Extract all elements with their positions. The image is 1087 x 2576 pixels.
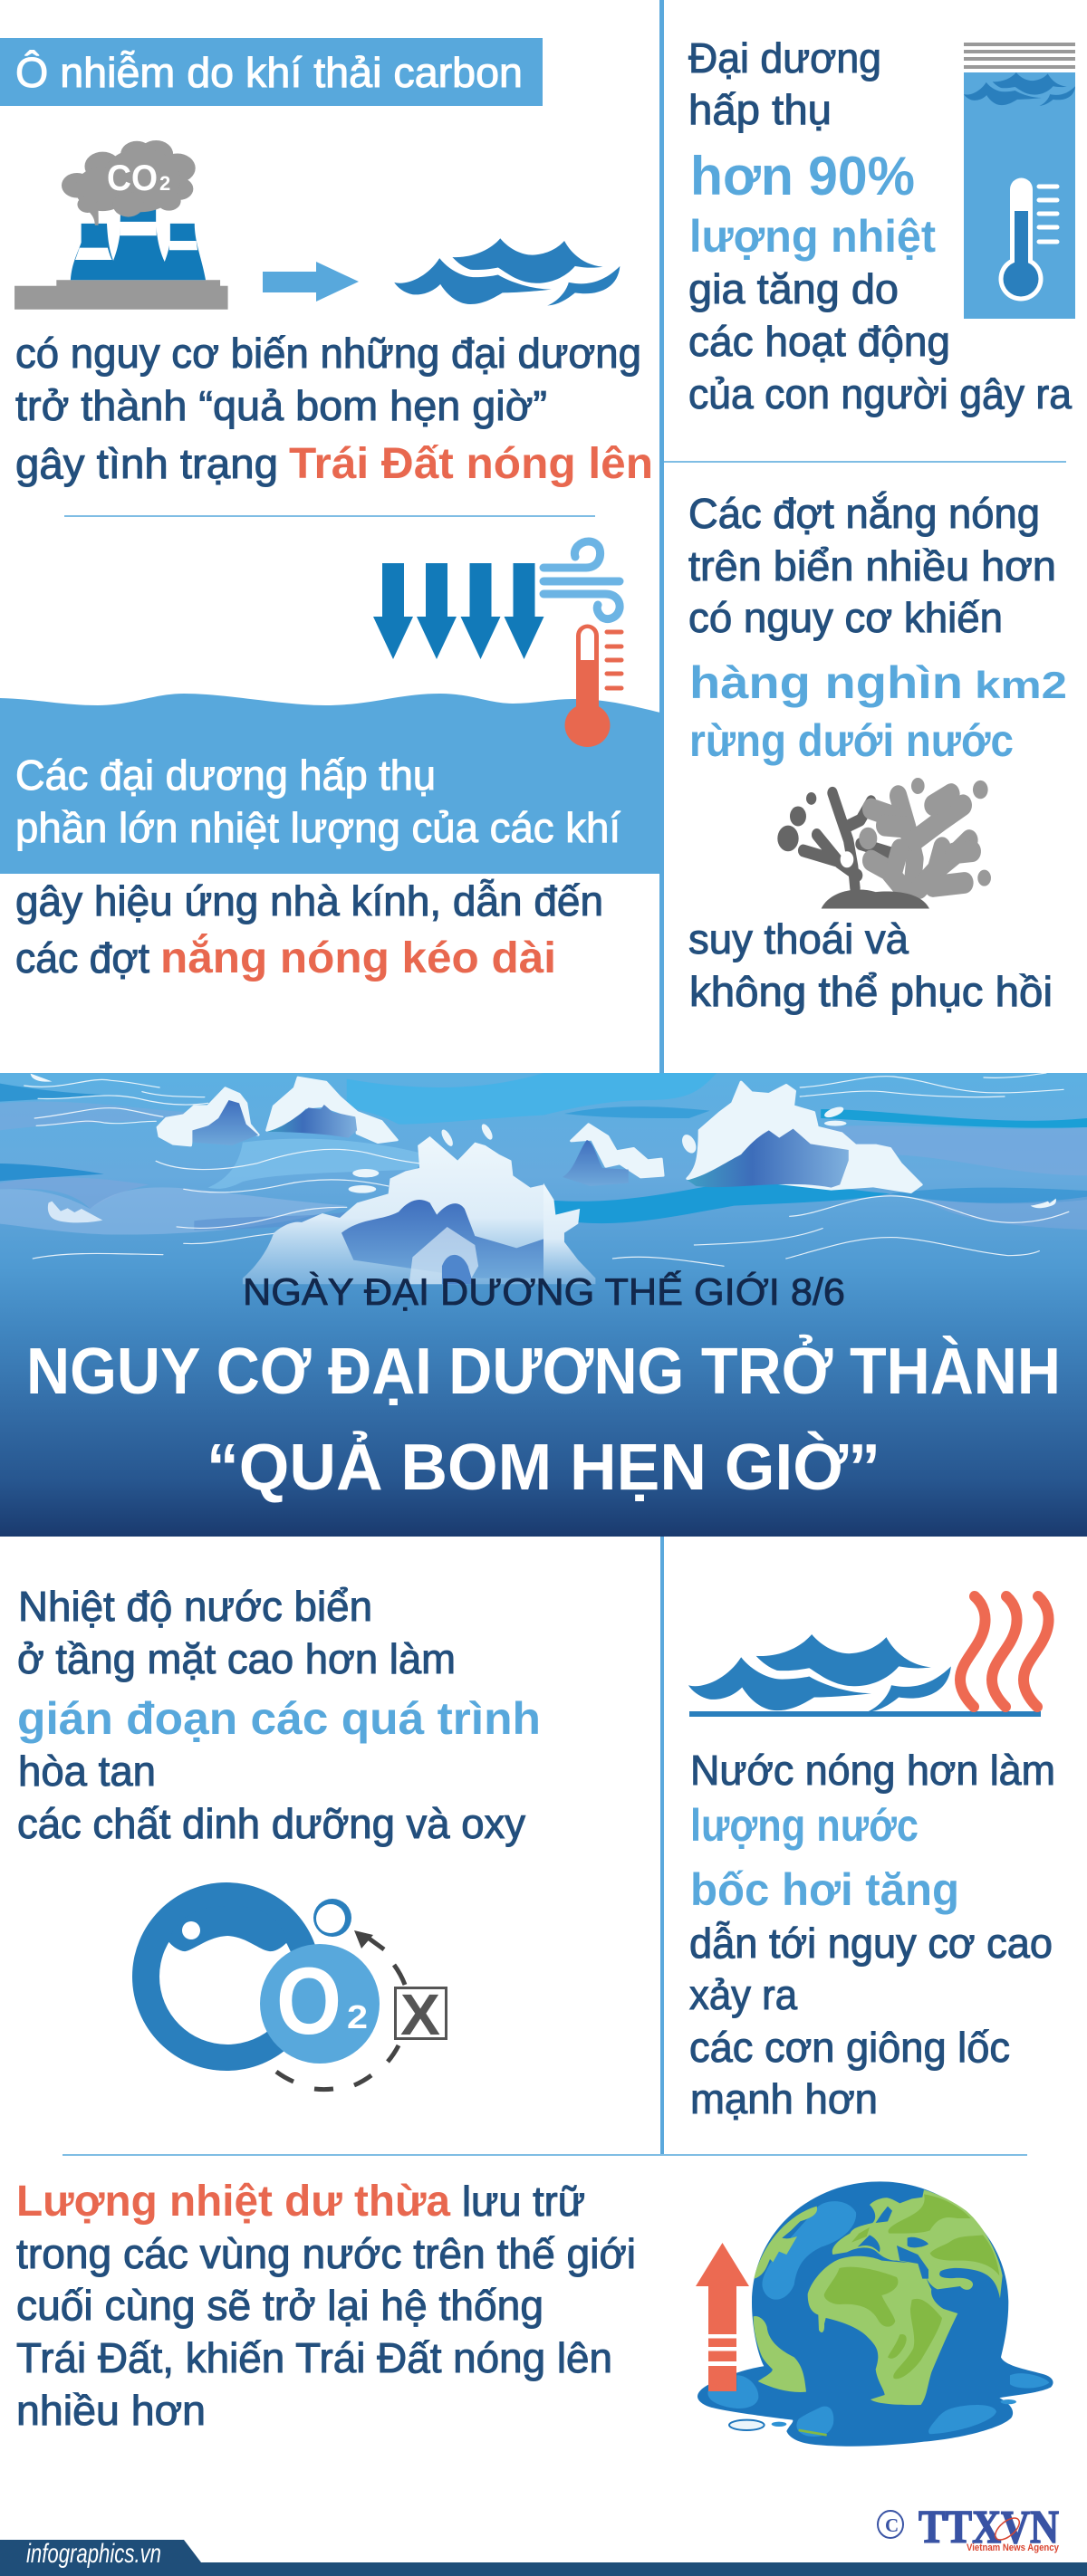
text: more evaporation: Nước nóng hơn làm (690, 1747, 1055, 1794)
arrow: factory to ocean (263, 262, 359, 302)
column divider: bottom (660, 1537, 664, 2156)
text: prolonged heatwaves: nắng nóng kéo dài (160, 933, 556, 982)
heading: carbon pollution (0, 38, 543, 106)
text: irreversible degradation (688, 915, 1053, 1015)
text: heat absorption: các hoạt động (688, 318, 950, 365)
text: excess heat (16, 2178, 636, 2434)
icon: red thermometer (565, 625, 621, 747)
text: more evaporation: dẫn tới nguy cơ cao (689, 1920, 1053, 1967)
copyright mark: C (885, 2514, 899, 2536)
arrow: rising heat (696, 2243, 749, 2391)
text: excess heat: Trái Đất, khiến Trái Đất nóng lên (16, 2334, 612, 2381)
text: marine heatwaves: hàng nghìn (689, 657, 963, 708)
logo swirl (992, 2514, 1023, 2543)
text: surface water temperature: Nhiệt độ nước biển (18, 1583, 372, 1630)
text: excess heat: trong các vùng nước trên thế giới (16, 2230, 636, 2277)
icon: ocean wave (394, 238, 620, 306)
icon: coral (777, 778, 991, 908)
icon: oxygen bubbles: O (276, 1949, 341, 2054)
divider: right (664, 461, 1066, 463)
agency tagline: Vietnam News Agency (967, 2542, 1060, 2553)
text: excess heat: cuối cùng sẽ trở lại hệ thống (16, 2282, 544, 2329)
text: more evaporation (689, 1747, 1055, 2122)
column divider: top (659, 0, 664, 1074)
text: prolonged heatwaves: các đợt (15, 934, 149, 982)
title: “QUẢ BOM HẸN GIỜ” (207, 1431, 880, 1504)
panel: surface temperature (17, 1583, 541, 2090)
agency name: TTXVN (919, 2502, 1059, 2553)
water band (0, 694, 660, 874)
text: time bomb risk: gây tình trạng (15, 440, 278, 487)
text: heat absorption: gia tăng do (688, 265, 899, 312)
text: marine heatwaves: có nguy cơ khiến (688, 594, 1003, 641)
text: excess heat: Lượng nhiệt dư thừa (16, 2178, 450, 2226)
panel: carbon pollution (0, 38, 653, 488)
text: heat absorption: hấp thụ (688, 86, 832, 133)
splash: top-left pair (158, 1077, 397, 1145)
panel: evaporation (688, 1596, 1055, 2122)
icon: factory with CO2: 2 (159, 172, 170, 195)
icon: oxygen bubbles: 2 (347, 1998, 368, 2035)
footer bar (0, 2540, 1087, 2576)
icon: oxygen bubbles: X (400, 1982, 440, 2047)
heading: carbon pollution: Ô nhiễm do khí thải carbon (15, 49, 523, 96)
text: more evaporation: xảy ra (689, 1971, 797, 2018)
text: marine heatwaves (688, 490, 1067, 766)
subtitle: World Ocean Day: NGÀY ĐẠI DƯƠNG THẾ GIỚI 8/6 (243, 1270, 845, 1313)
panel: excess heat returns to Earth (16, 2178, 1053, 2447)
title (26, 1335, 1061, 1504)
text: irreversible degradation: suy thoái và (688, 915, 909, 962)
text: surface water temperature: gián đoạn các quá trình (17, 1693, 541, 1744)
icon: downward heat arrows (373, 563, 544, 659)
panel: underwater forests (688, 490, 1067, 1015)
text: more evaporation: bốc hơi tăng (690, 1864, 959, 1915)
icon: wind (544, 541, 620, 619)
text: oceans absorb greenhouse heat: Các đại dương hấp thụ (15, 752, 436, 799)
icon: hot water evaporating (688, 1596, 1049, 1717)
text: surface water temperature: ở tầng mặt cao hơn làm (17, 1635, 456, 1682)
text: marine heatwaves: trên biển nhiều hơn (688, 542, 1056, 589)
text: heat absorption: của con người gây ra (688, 370, 1072, 417)
panel: ocean absorbs 90% of heat (688, 34, 1075, 417)
ocean illustration (0, 1073, 1087, 1537)
text: more evaporation: lượng nước (690, 1800, 919, 1851)
text: heat absorption: lượng nhiệt (689, 211, 936, 262)
text: more evaporation: các cơn giông lốc (689, 2024, 1010, 2071)
text: heat absorption: hơn 90% (690, 146, 915, 206)
icon: factory with CO2 (14, 140, 228, 310)
text: oceans absorb greenhouse heat: phần lớn nhiệt lượng của các khí (15, 804, 620, 851)
text: time bomb risk: Trái Đất nóng lên (289, 440, 653, 488)
text: heat absorption: Đại dương (688, 34, 881, 81)
divider: left (64, 515, 595, 517)
icon: oxygen bubbles (132, 1882, 446, 2090)
splash: center large (243, 1123, 544, 1284)
text: heat absorption (688, 34, 1072, 417)
text: surface water temperature (17, 1583, 541, 1847)
text: prolonged heatwaves: gây hiệu ứng nhà kính, dẫn đến (15, 877, 603, 924)
splash: right (679, 1082, 921, 1192)
text: marine heatwaves: km2 (975, 664, 1067, 706)
splash: small (563, 1125, 663, 1186)
text: excess heat: lưu trữ (462, 2178, 585, 2225)
text: marine heatwaves: Các đợt nắng nóng (688, 490, 1040, 537)
copyright mark (878, 2511, 903, 2538)
icon: factory with CO2: CO (107, 158, 158, 198)
text: irreversible degradation: không thể phục hồi (689, 968, 1053, 1015)
icon: melting globe (697, 2181, 1053, 2447)
text: time bomb risk (15, 330, 653, 488)
footer (0, 2539, 1087, 2576)
footer site name: infographics.vn (26, 2539, 161, 2569)
text: time bomb risk: trở thành “quả bom hẹn giờ” (15, 382, 547, 429)
divider: bottom (63, 2154, 1027, 2156)
text: oceans absorb greenhouse heat (15, 752, 620, 851)
text: time bomb risk: có nguy cơ biến những đại dương (15, 330, 641, 377)
text: surface water temperature: hòa tan (18, 1748, 156, 1795)
panel: heatwaves (0, 541, 660, 982)
text: excess heat: nhiều hơn (16, 2387, 206, 2434)
text: surface water temperature: các chất dinh dưỡng và oxy (17, 1800, 525, 1847)
text: marine heatwaves: rừng dưới nước (689, 715, 1014, 766)
icon: thermometer in water (964, 43, 1075, 319)
banner: ocean waves with title (0, 1073, 1087, 1537)
text: prolonged heatwaves (15, 877, 603, 982)
text: more evaporation: mạnh hơn (690, 2075, 878, 2122)
logo: TTXVN (878, 2502, 1060, 2553)
